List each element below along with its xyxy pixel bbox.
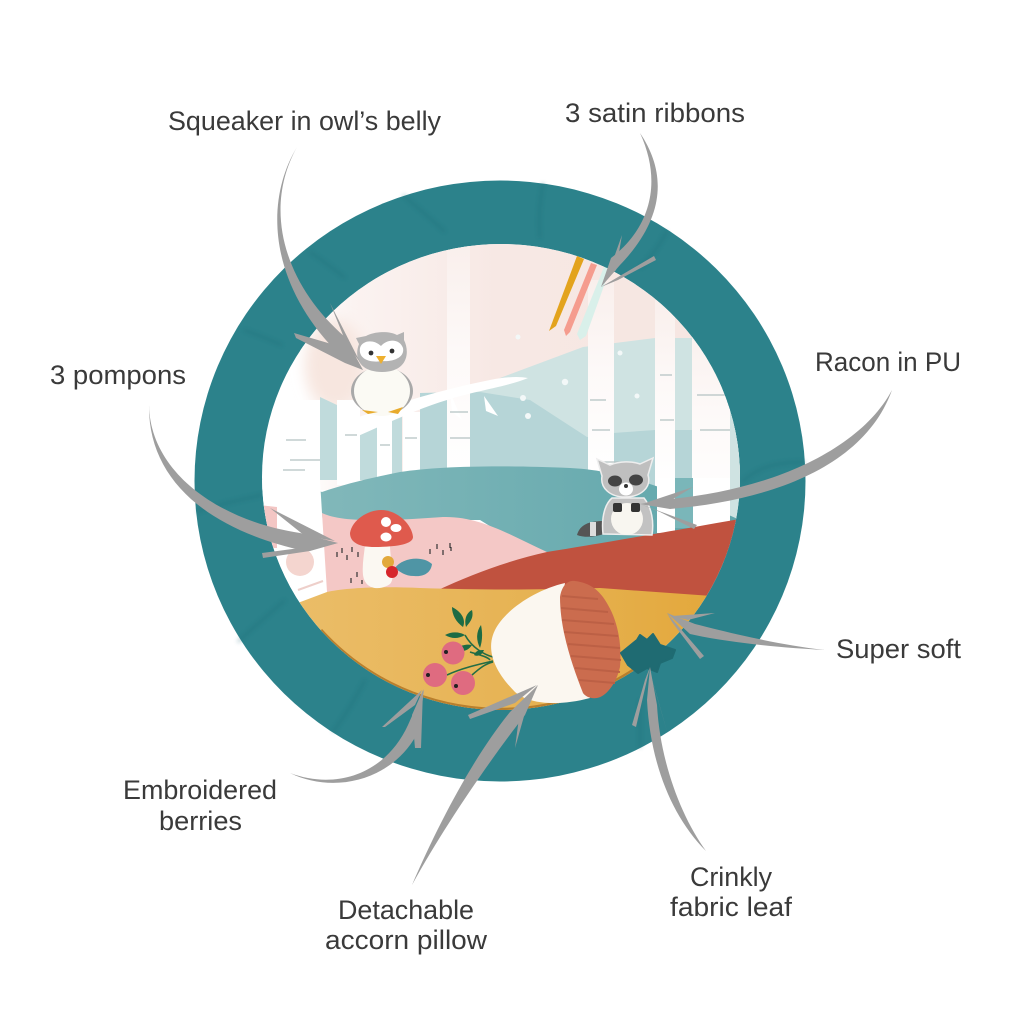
- icon: raccoon appliqué: [577, 458, 653, 537]
- label: 3 satin ribbons: [565, 98, 745, 128]
- pale pink moon: [286, 548, 323, 590]
- panel: padded teal ring of the play mat: [194, 180, 806, 782]
- icon: embroidered berries and leaves: [423, 607, 493, 695]
- arrow: [290, 689, 424, 783]
- red hill: [438, 518, 745, 600]
- mountains: [426, 338, 738, 449]
- label: Racon in PU: [815, 347, 961, 377]
- birch trees: [447, 246, 730, 486]
- birch bark ticks: [283, 375, 730, 470]
- label: accorn pillow: [325, 925, 488, 955]
- arrow: [149, 405, 338, 558]
- snow dots: [516, 334, 640, 419]
- label: Super soft: [836, 634, 961, 664]
- background sky: [255, 240, 745, 720]
- orange pompon: [382, 556, 394, 568]
- left white tree: [262, 480, 322, 604]
- mustard hill: [295, 587, 712, 720]
- callout: super soft: [667, 613, 961, 664]
- icon: owl toy: [351, 332, 413, 416]
- arrow: [601, 133, 658, 287]
- leaf pompon: [395, 559, 432, 576]
- branch: [350, 377, 528, 436]
- label: Squeaker in owl’s belly: [168, 106, 441, 136]
- label: 3 pompons: [50, 360, 186, 390]
- label: Crinkly: [690, 862, 772, 892]
- icon: satin ribbons: [549, 256, 610, 340]
- arrow: [632, 667, 706, 851]
- callout: crinkly fabric leaf: [632, 667, 793, 922]
- right birch trunks in front of hill: [657, 478, 730, 533]
- callout: detachable acorn pillow: [325, 685, 538, 955]
- infographic canvas: [51, 102, 961, 954]
- teal hill: [310, 466, 740, 560]
- pink hill: [322, 513, 547, 592]
- label: [670, 862, 793, 922]
- callout: 3 satin ribbons: [565, 98, 745, 287]
- acorn cap: [560, 581, 621, 698]
- callout: embroidered berries: [123, 689, 424, 836]
- red pompon: [386, 566, 398, 578]
- stitched tick marks: [337, 543, 451, 584]
- label: [325, 895, 488, 955]
- pale band at right edge: [730, 410, 740, 524]
- arrow: [277, 147, 363, 370]
- arrow: [667, 613, 825, 659]
- label: berries: [159, 806, 242, 836]
- icon: mushroom with pompons: [337, 510, 451, 588]
- icon: crinkly fabric leaf: [621, 634, 675, 673]
- callout: Racon in PU: [640, 347, 961, 529]
- callout: 3 pompons: [50, 360, 338, 558]
- label: Detachable: [338, 895, 474, 925]
- callout: squeaker in owl's belly: [168, 106, 441, 370]
- label: fabric leaf: [670, 892, 793, 922]
- arrow: [640, 390, 892, 529]
- label: [123, 775, 277, 836]
- arrow: [412, 685, 538, 885]
- panel: printed forest scene: [255, 240, 745, 720]
- label: Embroidered: [123, 775, 277, 805]
- icon: detachable acorn pillow: [491, 581, 621, 703]
- pink sliver: [264, 506, 277, 548]
